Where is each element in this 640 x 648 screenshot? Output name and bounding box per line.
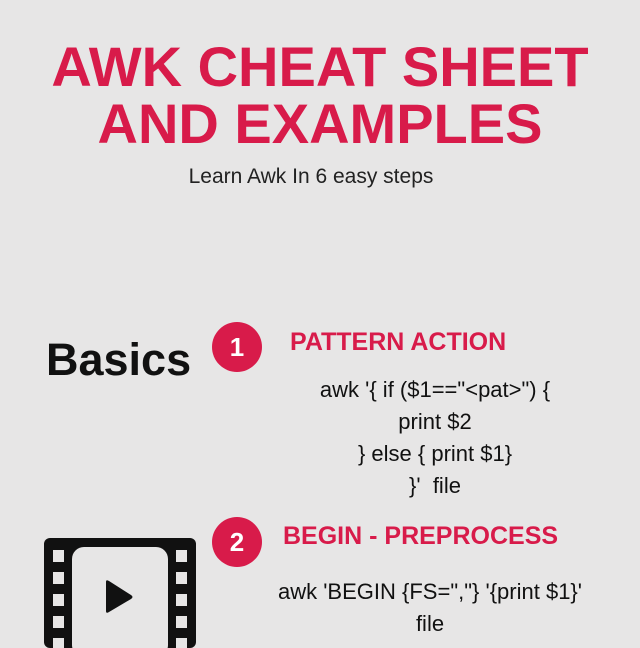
step 2 code bbox=[278, 579, 582, 636]
step 1 code: }' file bbox=[409, 473, 461, 498]
title: AWK CHEAT SHEET bbox=[51, 35, 589, 98]
step 2 title: BEGIN - PREPROCESS bbox=[283, 522, 558, 550]
step 2 code: file bbox=[416, 611, 444, 636]
step 1 code: } else { print $1} bbox=[358, 441, 512, 466]
step 1 code: awk '{ if ($1=="<pat>") { bbox=[320, 377, 550, 402]
step 1 number: 1 bbox=[230, 332, 244, 362]
heading: Basics: Basics bbox=[46, 334, 191, 385]
step 1 title: PATTERN ACTION bbox=[290, 328, 506, 356]
step 2 number: 2 bbox=[230, 527, 244, 557]
subtitle: Learn Awk In 6 easy steps bbox=[189, 165, 433, 188]
icon: film with play button bbox=[44, 538, 196, 648]
step 1 code bbox=[320, 377, 550, 498]
step 2 number bbox=[212, 517, 262, 567]
step 1 code: print $2 bbox=[398, 409, 472, 434]
step 1 number bbox=[212, 322, 262, 372]
title bbox=[51, 35, 589, 155]
step 2 code: awk 'BEGIN {FS=","} '{print $1}' bbox=[278, 579, 582, 604]
title: AND EXAMPLES bbox=[98, 92, 542, 155]
